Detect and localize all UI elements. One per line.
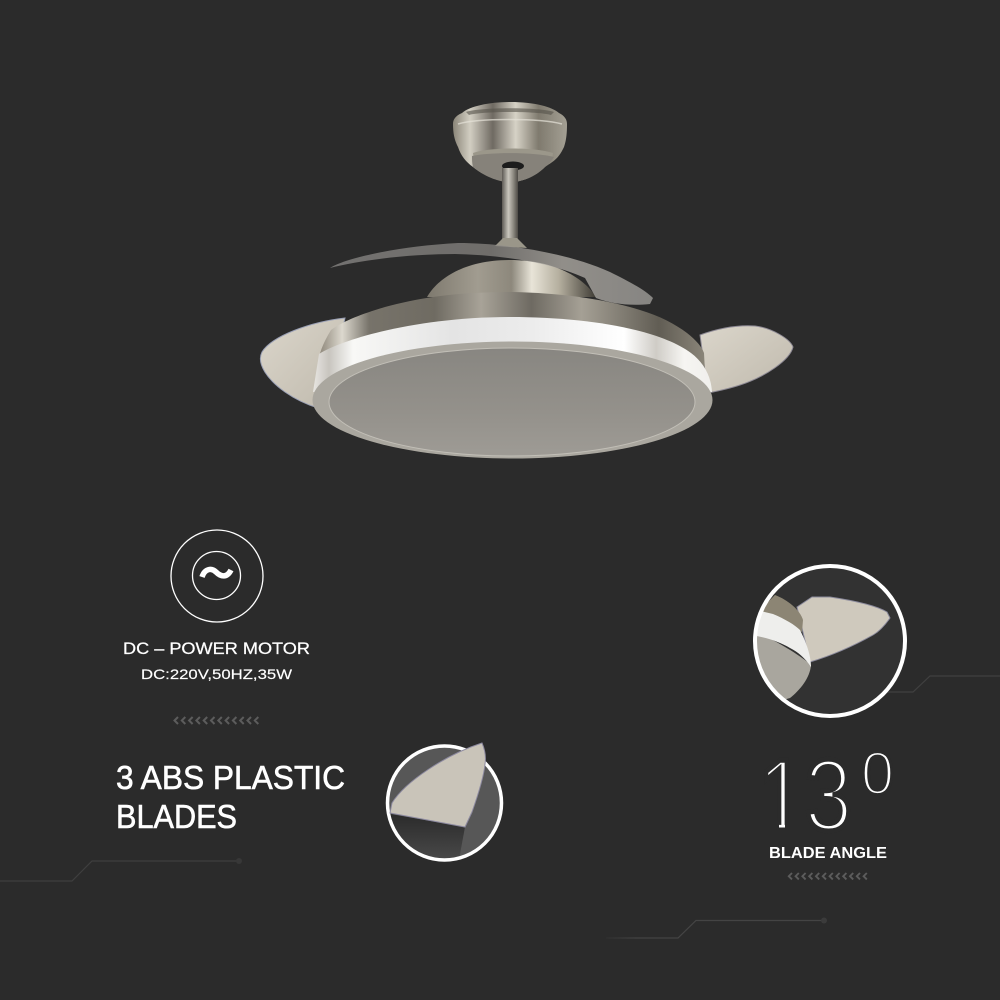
white band <box>313 317 712 392</box>
right blade <box>700 326 793 393</box>
stat: 13 degrees: 0 <box>861 740 894 807</box>
outer disc <box>312 342 712 458</box>
disc <box>757 636 811 700</box>
diffuser <box>329 348 695 456</box>
motor dome <box>427 260 596 297</box>
heading: 3 ABS plastic blades <box>116 759 345 835</box>
metal ring <box>763 595 803 632</box>
stat: 13 degrees: 13 <box>758 740 852 852</box>
text: DC specs: DC:220V,50HZ,35W <box>141 666 293 682</box>
circuit line: bottom <box>606 918 827 938</box>
text: DC power motor: DC – POWER MOTOR <box>123 639 310 658</box>
blade <box>797 597 890 662</box>
label: blade angle: BLADE ANGLE <box>769 845 887 862</box>
circuit line: right <box>885 676 1000 692</box>
circle photo: blade detail <box>385 743 502 865</box>
ceiling fan product image <box>260 102 793 458</box>
heading: 3 ABS plastic blades: BLADES <box>116 798 237 835</box>
collar <box>495 238 527 248</box>
heading: 3 ABS plastic blades: 3 ABS PLASTIC <box>116 759 345 796</box>
canopy <box>453 102 567 182</box>
chevron row: left <box>174 717 258 724</box>
icon: DC power <box>171 530 263 622</box>
left blade <box>260 318 345 408</box>
chevron row: right <box>789 873 867 879</box>
rod <box>502 168 518 240</box>
blade shape <box>390 743 485 827</box>
circuit line: left <box>0 858 242 881</box>
circle photo: blade angle detail <box>750 566 905 716</box>
back blade <box>330 243 653 305</box>
white band <box>757 612 811 667</box>
metal ring <box>319 292 705 372</box>
